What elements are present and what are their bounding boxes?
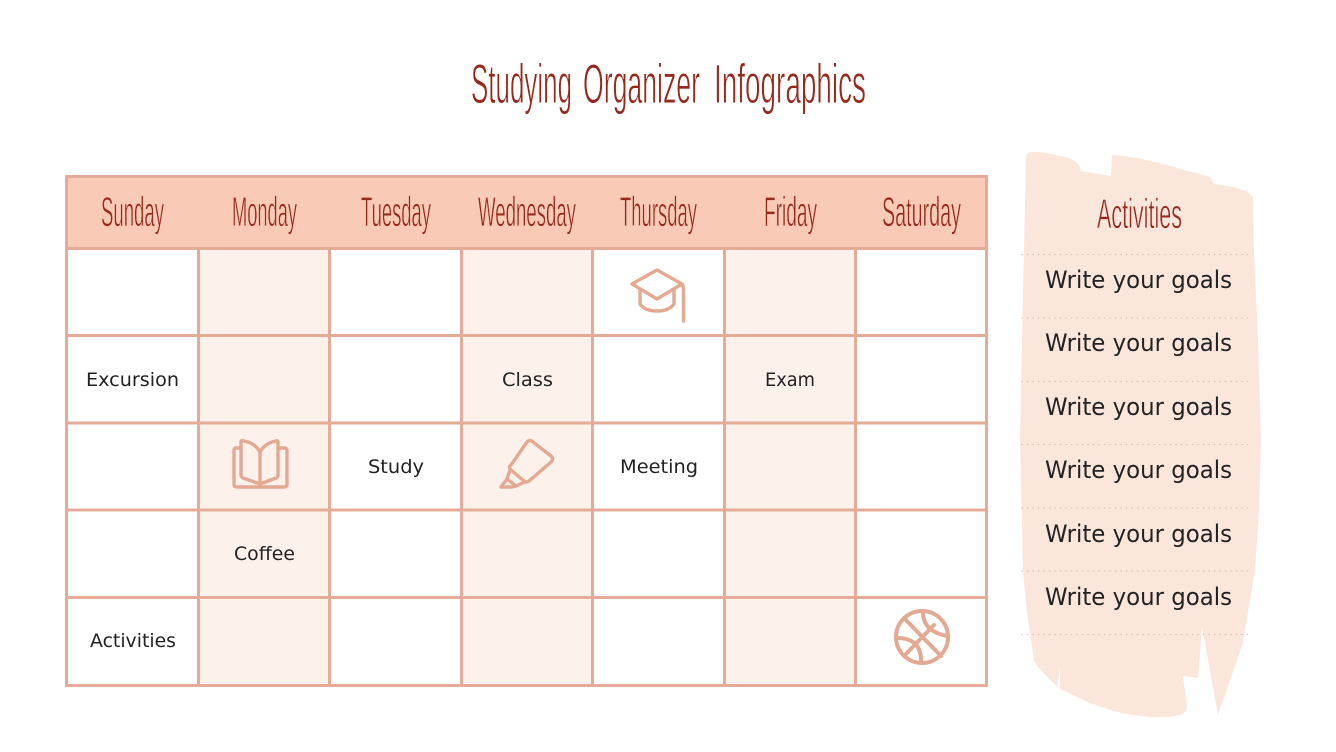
title: Studying (471, 52, 572, 115)
cell labels (86, 369, 815, 652)
panel heading: Activities (1097, 190, 1182, 237)
day headings: Thursday (620, 188, 697, 235)
icon: open book (234, 441, 287, 487)
day headings: Sunday (101, 188, 164, 235)
day headings: Wednesday (478, 188, 576, 235)
panel: weekly calendar: Saturday (882, 188, 961, 235)
goals list: Write your goals (1045, 393, 1232, 421)
icon: highlighter (501, 440, 552, 487)
icon: graduation cap (632, 270, 684, 321)
goals list: Write your goals (1045, 456, 1232, 484)
header row background (66, 176, 987, 248)
cell labels: Class (502, 369, 553, 391)
icon: basketball (896, 611, 948, 663)
day headings (101, 188, 961, 235)
day headings: Friday (764, 188, 817, 235)
goals list (1045, 266, 1232, 611)
goals list: Write your goals (1045, 520, 1232, 548)
goals list: Write your goals (1045, 329, 1232, 357)
cell labels: Meeting (620, 456, 698, 478)
cell labels: Excursion (86, 369, 179, 391)
text: Infographics (714, 52, 866, 115)
cell labels: Study (368, 456, 424, 478)
shaded day columns (198, 248, 855, 685)
cell labels: Exam (765, 369, 815, 391)
day headings: Monday (232, 188, 297, 235)
panel: activities list (1020, 152, 1261, 717)
brush background (1020, 152, 1261, 717)
goals list: Write your goals (1045, 266, 1232, 294)
cell labels: Activities (90, 630, 176, 652)
goals list: Write your goals (1045, 583, 1232, 611)
panel: weekly calendar (66, 176, 987, 686)
day headings: Tuesday (361, 188, 431, 235)
cell labels: Coffee (234, 543, 295, 565)
title: Organizer (583, 52, 700, 115)
